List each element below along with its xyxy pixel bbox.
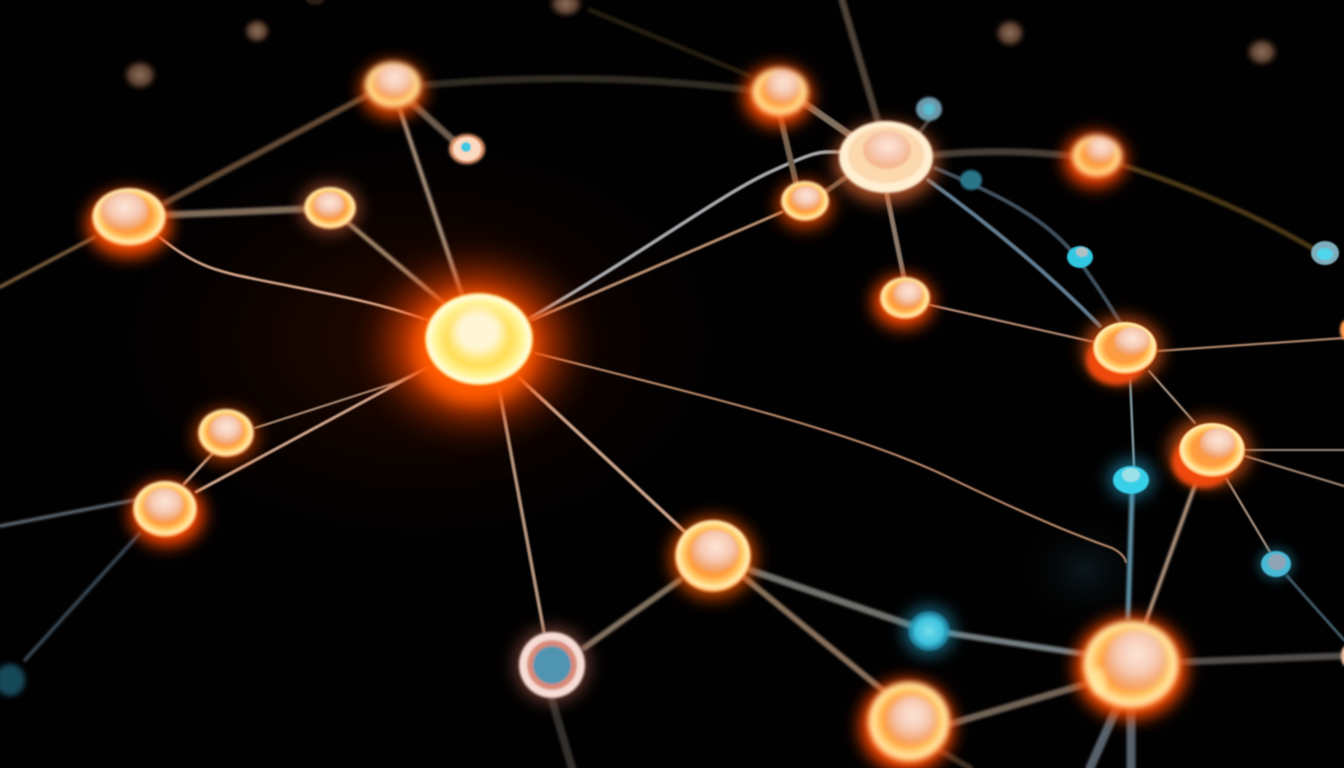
node lower center — [675, 520, 751, 592]
right lines — [780, 103, 1344, 640]
node right upper — [1093, 322, 1157, 374]
node right middle — [1179, 423, 1245, 477]
hub to lower lines — [184, 367, 686, 632]
node white ring blue core — [519, 632, 585, 698]
dim distant nodes — [121, 0, 1280, 92]
node lower left upper — [198, 409, 254, 457]
large node lower right — [1083, 621, 1179, 709]
dotted texture patch — [1015, 510, 1155, 630]
lower lines — [584, 474, 1199, 724]
offset orange shadow right upper — [1086, 335, 1146, 385]
blue node far right — [1311, 241, 1339, 265]
node below top right — [781, 181, 829, 221]
partial node right edge upper — [1340, 320, 1344, 340]
node far top right — [1072, 135, 1122, 177]
node center right — [880, 277, 930, 319]
dim blue node — [960, 170, 982, 190]
node upper middle left — [304, 187, 356, 229]
background warm haze — [90, 120, 750, 560]
node white with blue centre — [449, 134, 485, 164]
node far left — [92, 188, 166, 246]
central hub node — [425, 293, 533, 385]
blue node top — [916, 97, 942, 121]
blue nodes — [0, 97, 1339, 698]
hub to right lines — [530, 152, 842, 318]
node bottom — [868, 682, 950, 762]
partial node right edge lower — [1341, 646, 1344, 666]
blue node mid right — [1067, 246, 1093, 268]
offset orange shadow right middle — [1172, 436, 1234, 488]
large node top right — [839, 121, 933, 193]
dim blue node lower left — [0, 664, 25, 696]
node top center right — [752, 68, 808, 116]
node top left — [365, 62, 421, 108]
upper-left lines — [165, 96, 463, 304]
blue node right — [1113, 466, 1149, 494]
cyan node centre bottom — [908, 611, 950, 651]
node lower left — [133, 481, 197, 537]
blue node lower right — [1261, 551, 1291, 577]
